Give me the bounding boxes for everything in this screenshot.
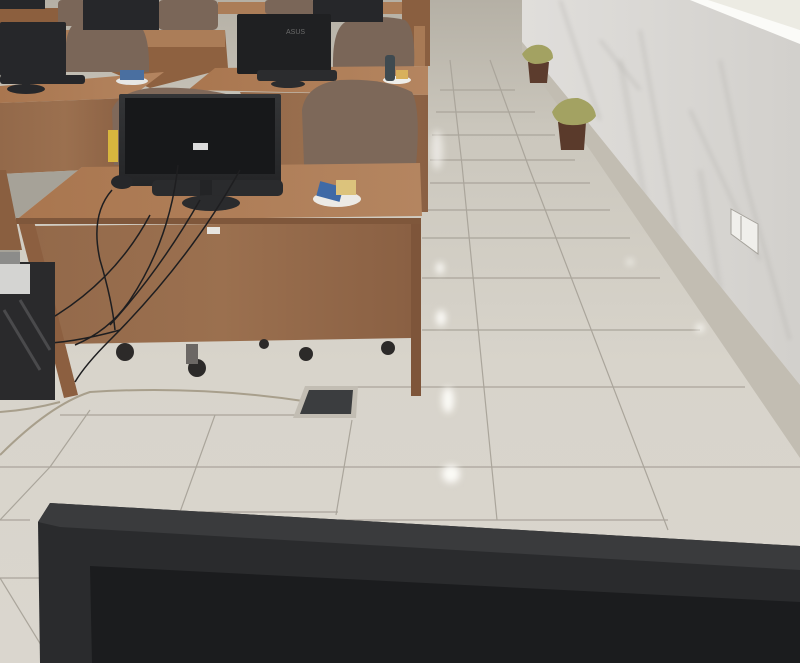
cables xyxy=(0,165,240,382)
desk top xyxy=(15,163,422,221)
back row of desks xyxy=(0,0,430,212)
main desk xyxy=(15,163,422,398)
desk modesty panel xyxy=(34,222,412,344)
wall skirting xyxy=(522,42,800,458)
printer xyxy=(0,252,55,400)
monitor top rim xyxy=(38,503,800,570)
second row items xyxy=(116,55,411,85)
chair left xyxy=(112,88,230,165)
left floor patch xyxy=(0,167,128,252)
floor reflections xyxy=(431,130,704,483)
far chairs xyxy=(58,0,414,72)
far monitors xyxy=(0,0,383,76)
wall upper band xyxy=(690,0,800,30)
left desk edge xyxy=(0,170,22,250)
floor box xyxy=(293,386,358,418)
wall moulding xyxy=(690,0,800,44)
foreground monitor xyxy=(38,503,800,663)
wall xyxy=(522,0,800,458)
floor cable xyxy=(0,390,310,455)
bin far xyxy=(522,45,553,83)
second row desk right xyxy=(188,66,428,212)
tag xyxy=(108,130,118,162)
far desks xyxy=(0,0,430,88)
monitor bezel xyxy=(38,503,800,663)
second row monitor xyxy=(237,14,337,88)
snack plate xyxy=(313,180,361,207)
second row chair xyxy=(302,80,418,165)
computer mouse xyxy=(111,175,133,189)
left monitor base xyxy=(0,75,85,94)
monitor screen xyxy=(90,566,800,663)
desk left leg xyxy=(18,221,78,398)
waste bins xyxy=(522,45,596,150)
desk right leg xyxy=(411,218,421,396)
second row desk left xyxy=(0,72,164,174)
wall socket xyxy=(731,209,758,254)
monitor brand: ASUS xyxy=(286,29,305,36)
main monitor xyxy=(119,94,283,211)
bin near xyxy=(552,98,596,150)
chair bases xyxy=(116,339,395,377)
desk label xyxy=(207,227,220,234)
